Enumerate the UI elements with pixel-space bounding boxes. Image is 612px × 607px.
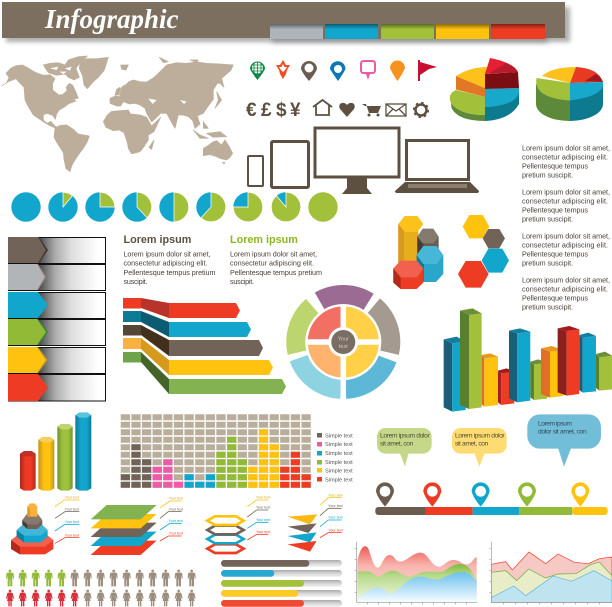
heading: Lorem ipsum brown: Lorem ipsum <box>124 234 191 246</box>
paragraph 3: consectetur adipiscing elit. <box>522 240 608 250</box>
text block: right column <box>522 144 610 312</box>
paragraph 4: consectetur adipiscing elit. <box>522 284 608 294</box>
speech bubble yellow: sit amet, con <box>455 440 489 447</box>
paragraph 4: pretium suscipit. <box>522 302 573 312</box>
timeline pin blue <box>472 482 490 507</box>
grid legend: Simple text <box>325 460 353 466</box>
speech bubble yellow: Lorem ipsum dolor <box>455 433 505 440</box>
grid legend <box>317 433 353 484</box>
paragraph 3 <box>522 232 610 268</box>
hexagon frames diagram <box>207 496 270 553</box>
paragraph 1 <box>522 144 610 180</box>
icon: currency symbols: € <box>246 100 257 121</box>
progress bars <box>221 560 342 607</box>
centre label <box>328 327 358 357</box>
text block: middle: Pellentesque tempus pretium <box>230 268 322 277</box>
text block: left: consectetur adipiscing elit. <box>124 258 208 268</box>
icon: red flag <box>418 60 437 81</box>
stacked layers diagram: Your text <box>169 497 183 501</box>
icon: phone <box>248 156 263 186</box>
paragraph 3: pretium suscipit. <box>522 258 573 268</box>
icon: heart <box>339 103 355 117</box>
yellow columns <box>253 429 274 488</box>
blue columns <box>189 474 210 488</box>
stacked layers diagram <box>91 497 183 555</box>
world map <box>2 56 233 172</box>
speech bubble blue: Lorem ipsum <box>538 421 572 428</box>
text block: left: Lorem ipsum dolor sit amet, <box>124 250 210 258</box>
timeline bar <box>375 507 608 515</box>
speech bubble green <box>377 428 432 467</box>
icon: currency symbols <box>246 100 301 121</box>
hexagon frames diagram: Your text <box>256 496 270 500</box>
triangle stack diagram: Your text <box>328 504 343 508</box>
grid legend: Simple text <box>325 451 353 457</box>
grid background <box>125 414 306 488</box>
3D pie chart exploded <box>450 58 519 121</box>
header banner <box>2 2 565 38</box>
icon: currency symbols: $ <box>276 100 287 121</box>
icon: currency symbols: ¥ <box>290 100 301 121</box>
brown columns <box>125 444 147 488</box>
red columns <box>285 452 306 488</box>
stepped pyramid diagram: Your text <box>65 507 79 511</box>
stacked layers diagram: Your text <box>169 532 183 536</box>
paragraph 2 <box>522 188 610 224</box>
timeline pin yellow <box>571 482 589 507</box>
waffle grid chart <box>125 414 306 488</box>
cylinder bars <box>20 412 91 491</box>
percentage pie row <box>11 192 338 222</box>
stepped pyramid diagram: Your text <box>65 533 79 537</box>
icon: cart <box>362 104 381 116</box>
paragraph 3: Lorem ipsum dolor sit amet, <box>522 232 610 240</box>
stepped pyramid diagram: Your text <box>65 496 79 500</box>
icon: brown pin <box>301 61 317 81</box>
text block: middle: Lorem ipsum dolor sit amet, <box>230 250 317 258</box>
paragraph 1: Lorem ipsum dolor sit amet, <box>522 144 610 152</box>
icon: star pin <box>276 60 290 79</box>
timeline pin brown <box>376 482 394 507</box>
paragraph 1: Pellentesque tempus <box>522 162 588 170</box>
stepped pyramid diagram: Your text <box>65 520 79 524</box>
icon: pink square pin <box>361 61 375 80</box>
people pictogram <box>6 570 196 606</box>
inner quadrants <box>320 318 367 366</box>
icon: tablet <box>272 142 308 188</box>
donut diagram <box>276 275 410 409</box>
pink columns <box>157 459 178 488</box>
stacked layers diagram: Your text <box>169 519 183 523</box>
icon: orange pin <box>390 61 405 81</box>
grid legend: Simple text <box>325 478 353 484</box>
timeline pin green <box>518 482 536 507</box>
3D hexagon cluster <box>393 216 443 289</box>
text block: left: suscipit. <box>124 277 148 286</box>
hexagon frames diagram: Your text <box>256 518 270 522</box>
men row <box>6 570 196 586</box>
icon: currency symbols: £ <box>261 100 272 121</box>
triangle stack diagram: Your text <box>328 528 343 532</box>
icon: monitor <box>315 128 399 194</box>
callouts <box>160 501 182 541</box>
text block: left: Pellentesque tempus pretium <box>124 268 216 277</box>
arrow label rows <box>8 237 106 401</box>
paragraph 2: pretium suscipit. <box>522 214 573 224</box>
stepped pyramid diagram <box>11 496 79 554</box>
ribbon arrow chart <box>123 298 286 394</box>
icon: home <box>313 100 332 115</box>
speech bubble green: Lorem ipsum dolor <box>380 433 430 440</box>
paragraph 1: consectetur adipiscing elit. <box>522 152 608 162</box>
hexagon frames diagram: Your text <box>256 506 270 510</box>
line area chart <box>489 542 612 604</box>
green columns <box>221 437 242 488</box>
flat hexagon cluster <box>458 215 509 288</box>
hexagon frames diagram: Your text <box>256 530 270 534</box>
paragraph 2: consectetur adipiscing elit. <box>522 196 608 206</box>
text block: middle <box>230 250 322 286</box>
speech bubble blue <box>527 414 601 467</box>
paragraph 2: Lorem ipsum dolor sit amet, <box>522 188 610 196</box>
text block: middle: consectetur adipiscing elit. <box>230 258 314 268</box>
paragraph 4: Lorem ipsum dolor sit amet, <box>522 276 610 284</box>
women row <box>6 590 196 606</box>
3D pie chart <box>536 67 603 121</box>
paragraph 1: pretium suscipit. <box>522 170 573 180</box>
triangle stack diagram <box>288 493 343 552</box>
icon: envelope <box>386 104 406 116</box>
callouts <box>247 500 268 540</box>
icon: gear <box>414 103 428 117</box>
stacked layers diagram: Your text <box>169 507 183 511</box>
paragraph 4: Pellentesque tempus <box>522 294 588 302</box>
icon: laptop <box>395 140 479 193</box>
colour tabs <box>270 24 545 39</box>
paragraph 2: Pellentesque tempus <box>522 206 588 214</box>
heading: Lorem ipsum green: Lorem ipsum <box>230 234 298 246</box>
centre label: text <box>339 344 348 350</box>
callouts <box>55 500 79 543</box>
paragraph 4 <box>522 276 610 312</box>
speech bubble yellow <box>452 428 507 467</box>
centre label: Your <box>338 336 349 342</box>
grid legend: Simple text <box>325 442 353 448</box>
grid legend: Simple text <box>325 468 353 474</box>
3D bar chart <box>444 308 612 412</box>
smooth area chart <box>355 542 477 604</box>
callouts <box>320 498 342 538</box>
paragraph 3: Pellentesque tempus <box>522 250 588 258</box>
icon: globe pin <box>250 62 265 80</box>
speech bubble blue: dolor sit amet, con <box>538 428 587 435</box>
header shadow <box>6 7 570 43</box>
triangle stack diagram: Your text <box>328 516 343 520</box>
text block: left <box>124 250 216 286</box>
outer ring segments <box>276 275 410 409</box>
grid legend: Simple text <box>325 434 353 440</box>
timeline pin red <box>423 482 441 507</box>
triangle stack diagram: Your text <box>328 493 343 497</box>
icon: blue pin <box>330 61 346 81</box>
speech bubble green: sit amet, con <box>380 440 414 447</box>
title: Infographic <box>44 4 179 34</box>
text block: middle: suscipit. <box>230 277 254 286</box>
